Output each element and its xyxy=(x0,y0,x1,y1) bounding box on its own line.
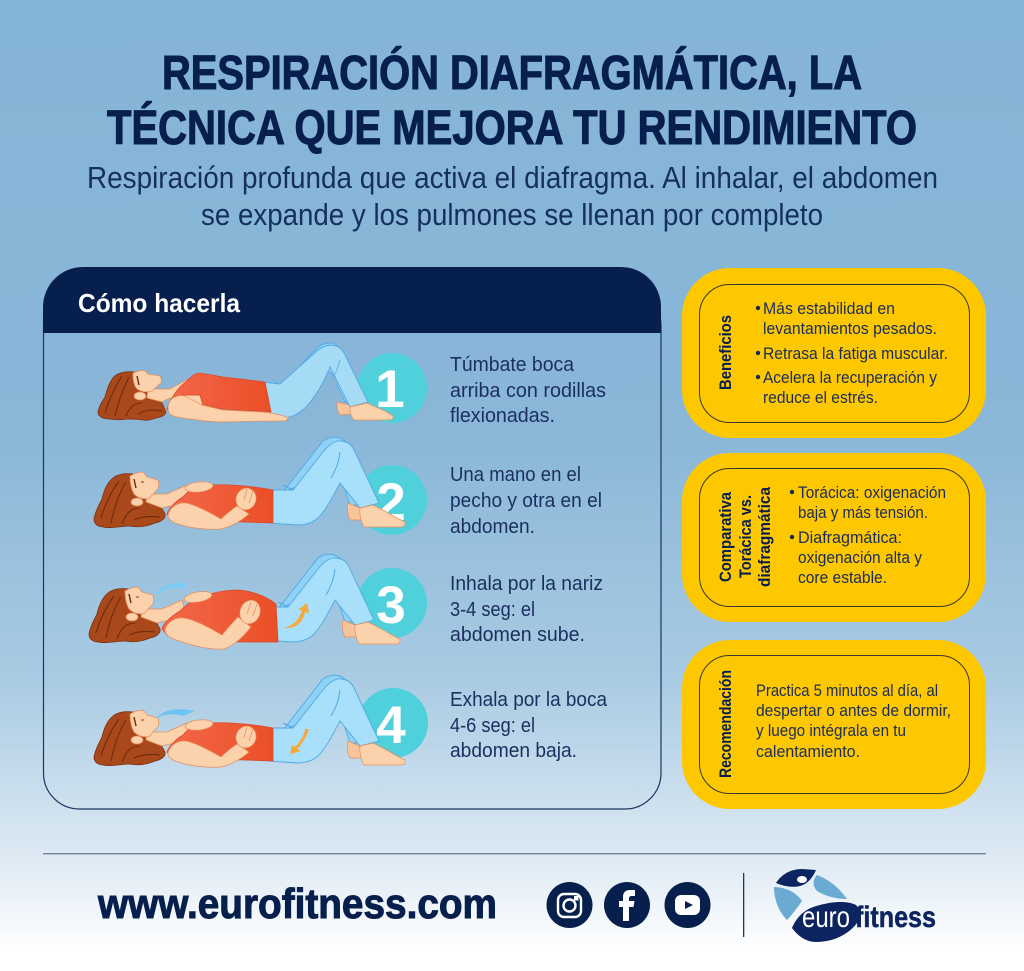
step 3 text: Inhala por la nariz xyxy=(450,573,603,595)
icon: youtube xyxy=(664,882,710,928)
step 2 text: abdomen. xyxy=(450,516,535,538)
heading: comparativa: diafragmática xyxy=(755,487,774,587)
icon: instagram xyxy=(546,882,592,928)
step 2 xyxy=(94,437,602,538)
comparison list: oxigenación alta y xyxy=(798,548,922,567)
step 1 xyxy=(98,343,606,427)
illustration: inhale, abdomen rises xyxy=(89,554,400,649)
benefits list: levantamientos pesados. xyxy=(763,319,937,338)
step 1 text xyxy=(450,354,606,427)
comparison list xyxy=(790,483,946,587)
benefits list xyxy=(756,299,948,407)
heading: comparativa: Comparativa xyxy=(716,492,735,582)
panel heading: Cómo hacerla xyxy=(78,288,241,318)
step 4 text: 4-6 seg: el xyxy=(450,715,535,737)
recommendation text xyxy=(756,681,951,761)
benefits list: Acelera la recuperación y xyxy=(763,368,937,387)
recommendation text: Practica 5 minutos al día, al xyxy=(756,681,938,700)
arrow down xyxy=(290,729,309,754)
step 2 text: Una mano en el xyxy=(450,464,581,486)
panel: comparativa xyxy=(682,453,986,622)
comparison list: Torácica: oxigenación xyxy=(798,483,946,502)
comparison list: baja y más tensión. xyxy=(798,503,928,522)
logo: eurofitness: fitness xyxy=(855,901,936,934)
number badge 2 xyxy=(357,465,427,535)
number badge 2: 2 xyxy=(376,473,406,532)
subtitle: Respiración profunda que activa el diafragma. Al inhalar, el abdomen xyxy=(87,160,938,195)
panel: beneficios xyxy=(682,268,986,438)
title xyxy=(107,45,917,155)
step 3 text xyxy=(450,573,603,646)
panel: recomendación xyxy=(682,640,986,809)
recommendation text: y luego intégrala en tu xyxy=(756,721,906,740)
step 1 text: flexionadas. xyxy=(450,405,555,427)
benefits list: Más estabilidad en xyxy=(763,299,895,318)
heading: recomendación: Recomendación xyxy=(716,670,735,778)
number badge 3 xyxy=(357,568,427,638)
step 1 text: Túmbate boca xyxy=(450,354,575,376)
recommendation text: despertar o antes de dormir, xyxy=(756,701,951,720)
number badge 1: 1 xyxy=(375,360,405,419)
number badge 4: 4 xyxy=(376,696,406,755)
heading: beneficios: Beneficios xyxy=(716,315,735,390)
step 3 text: abdomen sube. xyxy=(450,624,585,646)
panel header xyxy=(43,267,661,333)
recommendation text: calentamiento. xyxy=(756,742,860,761)
breath out xyxy=(156,709,195,718)
step 2 text: pecho y otra en el xyxy=(450,490,602,512)
heading: comparativa xyxy=(716,487,774,587)
panel: cómo hacerla xyxy=(43,267,661,809)
step 4 text: abdomen baja. xyxy=(450,740,577,762)
subtitle xyxy=(87,160,938,232)
step 3 xyxy=(89,554,603,649)
step 4 text: Exhala por la boca xyxy=(450,689,608,711)
step 2 text xyxy=(450,464,602,538)
step 3 text: 3-4 seg: el xyxy=(450,599,535,621)
heading: comparativa: Torácica vs. xyxy=(736,495,755,578)
comparison list: core estable. xyxy=(798,568,887,587)
illustration: hands on chest and abdomen xyxy=(94,437,405,529)
panel outline xyxy=(44,290,661,809)
website url: www.eurofitness.com xyxy=(97,880,497,927)
number badge 4 xyxy=(358,688,428,758)
comparison list: Diafragmática: xyxy=(798,528,902,547)
step 4 text xyxy=(450,689,608,762)
logo: eurofitness: euro xyxy=(802,901,850,934)
illustration: exhale, abdomen falls xyxy=(94,675,405,767)
title: RESPIRACIÓN DIAFRAGMÁTICA, LA xyxy=(162,45,862,100)
arrow up xyxy=(284,603,309,628)
benefits list: reduce el estrés. xyxy=(763,388,878,407)
subtitle: se expande y los pulmones se llenan por completo xyxy=(201,197,823,232)
number badge 1 xyxy=(357,353,427,423)
step 4 xyxy=(94,675,608,767)
icon: facebook xyxy=(604,882,650,928)
step 1 text: arriba con rodillas xyxy=(450,380,606,402)
raised belly xyxy=(162,590,278,649)
benefits list: Retrasa la fatiga muscular. xyxy=(763,344,948,363)
number badge 3: 3 xyxy=(376,576,406,635)
illustration: woman lying, arms at sides xyxy=(98,343,393,422)
logo: eurofitness xyxy=(774,869,936,942)
breath in xyxy=(155,583,185,594)
